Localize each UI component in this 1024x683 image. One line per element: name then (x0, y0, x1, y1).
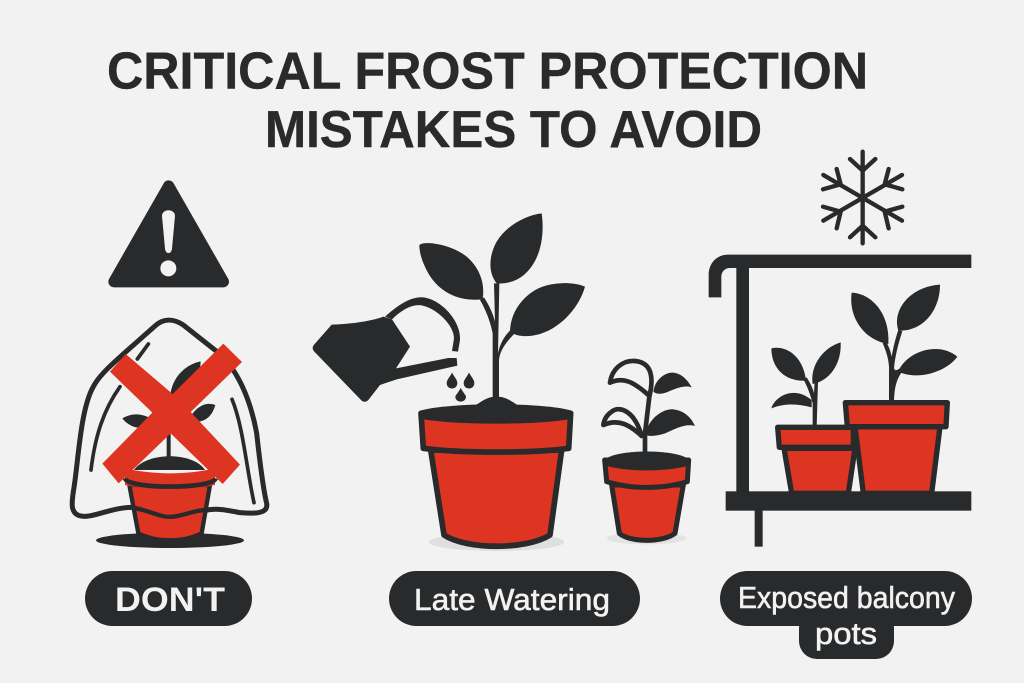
ground red pot (603, 452, 691, 540)
plant: tall balcony plant (851, 285, 957, 402)
label: Exposed balcony pots (720, 571, 972, 659)
icon: warning triangle (114, 186, 223, 282)
title: CRITICAL FROST PROTECTION (107, 42, 868, 100)
label: DON'T (85, 571, 252, 626)
icon: snowflake (823, 152, 902, 243)
panel: exposed balcony pots (603, 152, 971, 547)
label: DON'T: DON'T (115, 581, 225, 619)
title (107, 42, 868, 159)
ground shadow (96, 533, 244, 548)
plant: small balcony plant (771, 342, 841, 427)
icon: watering can (313, 297, 460, 402)
red cross (102, 344, 242, 484)
ground pot shadow (607, 532, 687, 544)
label: Exposed balcony pots: Exposed balcony (738, 580, 955, 615)
large balcony pot (845, 403, 947, 493)
plant: wilting ground plant (603, 361, 695, 452)
large red pot (421, 406, 571, 546)
plastic cover (72, 320, 267, 516)
balcony railing and shelf (709, 255, 971, 547)
covered plant (122, 361, 215, 470)
red pot (125, 468, 216, 540)
title: MISTAKES TO AVOID (265, 101, 762, 159)
label: Exposed balcony pots: pots (815, 616, 877, 651)
panel: don't cover plants with plastic (72, 186, 267, 548)
label: Late Watering (389, 571, 640, 626)
icon: water drops (447, 373, 474, 402)
small balcony pot (778, 427, 855, 493)
pot shadow (429, 533, 564, 551)
plant with three leaves (419, 213, 585, 407)
label: Late Watering: Late Watering (414, 582, 610, 617)
panel: late watering (313, 213, 585, 551)
